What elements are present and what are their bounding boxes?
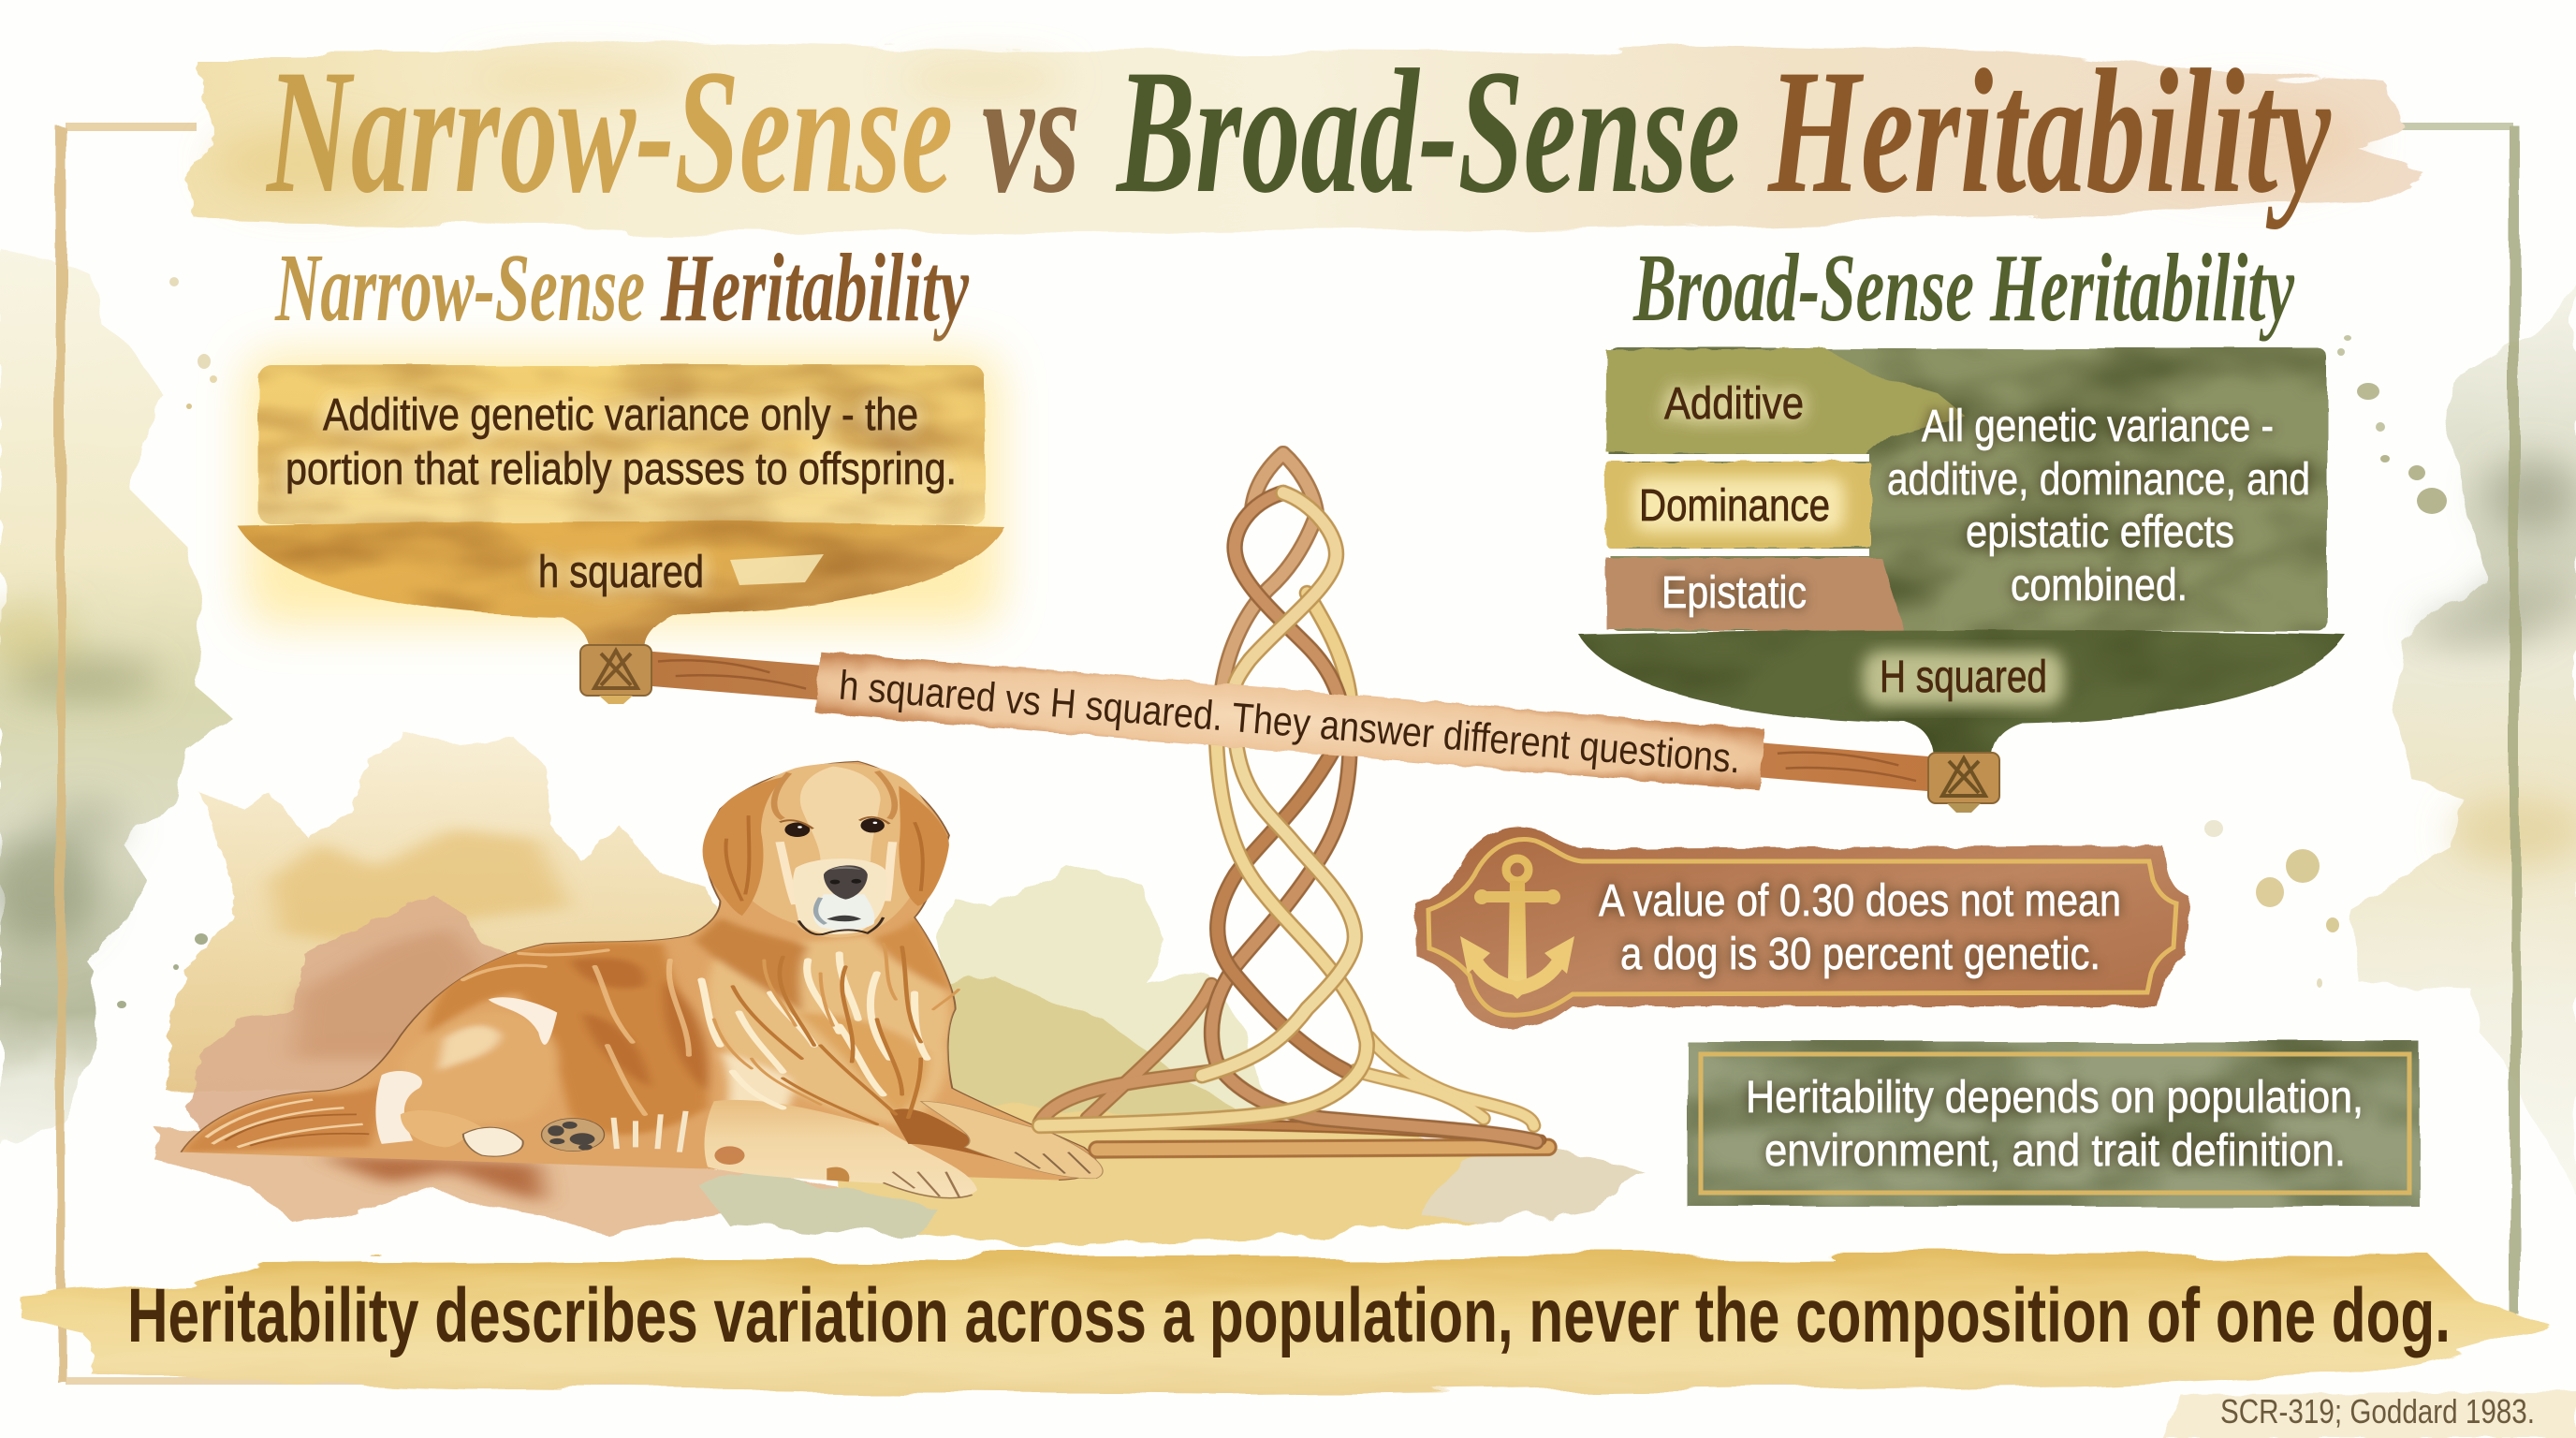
dog muzzle [793,858,887,934]
beam label text: h squared vs H squared. They answer different questions. [837,663,1742,782]
narrow definition text: portion that reliably passes to offspring. [285,445,957,494]
dog soft body colour [181,917,952,1152]
callout: anchor plaque [1415,827,2189,1028]
wash: behind dog, tan and brown [156,730,858,1236]
white gap under dominance [1603,549,1869,556]
dog belly fringe [614,1111,686,1152]
dog head [703,763,949,938]
strand: upper gold braid [1234,492,1336,703]
title text: Narrow-Sense [266,34,953,230]
plaque body [1415,827,2189,1028]
broad definition text [1887,402,2310,610]
dog rear leg and paw [401,1110,482,1147]
narrow definition text: Additive genetic variance only - the [323,390,918,440]
broad main olive box [1610,348,2327,631]
spatter dots [117,277,2447,1008]
dog flank shading [426,942,709,1135]
beam grain [657,657,1918,781]
broad definition text: combined. [2011,561,2188,610]
plaque text: a dog is 30 percent genetic. [1620,930,2100,979]
dog upturned paw [542,1119,605,1152]
background washes [0,248,2576,1245]
frame right line [2510,126,2520,1315]
illustration: golden retriever lying down [181,761,1103,1198]
strand: right foot gold [1354,1037,1534,1125]
strand: upper brown braid [1235,492,1340,703]
dog forehead blaze [800,767,881,861]
dog body hair strands [463,950,689,1114]
broad heading: Heritability [1989,234,2295,342]
panel: narrow-sense heritability [238,234,1003,648]
title text: vs [982,34,1080,230]
strand: left foot brown [1040,985,1216,1123]
title text [266,34,2331,230]
frame left line [56,126,66,1381]
broad heading: Broad-Sense [1632,234,1974,342]
H squared label: H squared [1880,653,2047,702]
dog nose [824,865,868,900]
frame bottom-left stroke [66,1377,2031,1385]
epistatic label: Epistatic [1661,568,1807,618]
strand: lower brown crossing [1218,746,1345,1071]
narrow definition box [258,365,985,524]
callout: population note [1688,1042,2420,1207]
h squared label: h squared [538,548,704,597]
scale stand: braided knot [1040,453,1548,1150]
left beam joint [580,645,651,704]
beam: tilted scale arm [608,634,1970,807]
additive block [1606,348,1966,456]
dog front left leg [705,1100,977,1197]
panel: broad-sense heritability [1579,234,2346,755]
narrow scale bowl [238,521,1003,648]
note text: Heritability depends on population, [1746,1073,2364,1123]
narrow heading: Narrow-Sense [274,234,645,342]
title banner [187,39,2424,234]
beam wood [609,648,1969,795]
broad definition text: additive, dominance, and [1887,455,2310,505]
title banner soft patches [215,63,2368,201]
wash: left side dark patches [0,605,159,946]
dog tail [181,1078,388,1152]
narrow heading: Heritability [660,234,970,342]
frame top-left stroke [66,123,197,131]
note text [1746,1073,2364,1176]
dog right ear [899,786,949,906]
dominance label: Dominance [1639,481,1830,531]
strand: top right outer gold [1307,593,1350,698]
narrow definition text [285,390,957,494]
note box [1688,1042,2420,1207]
note gold border [1701,1054,2409,1193]
additive label: Additive [1664,379,1804,429]
narrow glow [245,354,1000,625]
broad definition text: All genetic variance - [1922,402,2274,451]
dog chest hair strands [701,944,959,1124]
wash: right side olive [2349,281,2576,1196]
dog rear thigh [435,1024,564,1071]
wash: behind dog right, olive and floor gold [693,866,1647,1245]
dominance block [1606,462,1871,548]
dog chest [708,931,950,1127]
white gap under additive [1603,454,1869,462]
epistatic block [1606,558,1904,631]
right beam joint [1928,753,1999,813]
note text: environment, and trait definition. [1764,1126,2346,1176]
strand: lower gold inner [1202,737,1354,1076]
strand: lower gold outer [1040,737,1367,1125]
dog left ear [703,776,786,916]
beam label plaque [815,652,1764,790]
wash: right side dark patches [2420,459,2576,867]
dog body silhouette [181,761,1097,1180]
strand: lower brown from right [1211,737,1536,1141]
footer banner [22,1255,2553,1395]
strand: top loop [1221,453,1317,698]
broad definition text: epistatic effects [1966,507,2234,557]
plaque text [1599,876,2121,979]
frame top-right stroke [2396,123,2513,130]
wash: left side olive [0,248,231,1144]
plaque gold border [1428,840,2176,1015]
stand base planks [1040,1124,1548,1150]
broad scale bowl [1579,630,2346,755]
plaque text: A value of 0.30 does not mean [1599,876,2121,926]
dog front right leg [889,1108,1015,1164]
H squared glow [1863,651,2064,707]
citation wash [2162,1391,2576,1438]
dog eyes [784,823,810,837]
dominance glow [1633,477,1844,532]
icon: anchor [1460,858,1574,999]
title text: Broad-Sense [1116,34,1740,230]
dog tufts and feather [489,997,557,1045]
bowl highlight [730,554,824,585]
